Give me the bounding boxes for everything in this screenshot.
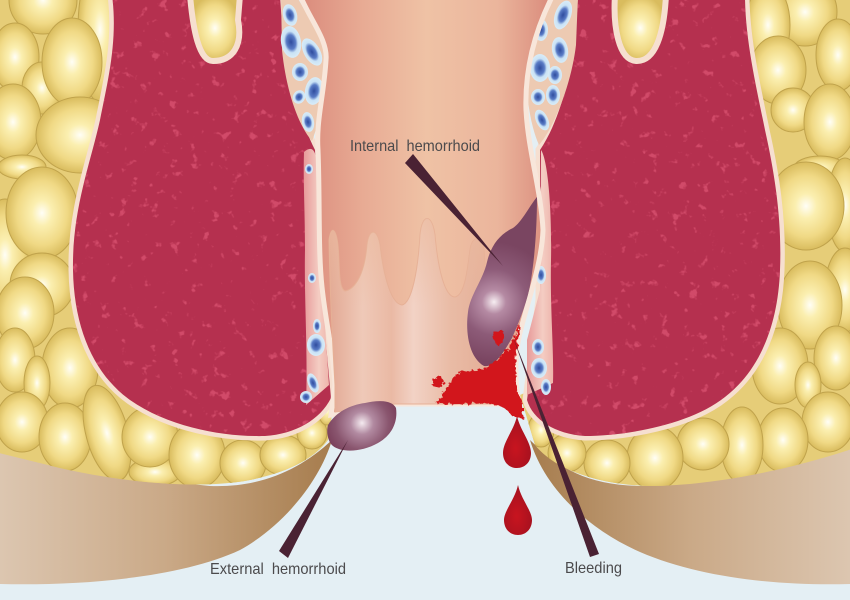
vessels left <box>278 0 327 141</box>
fat lobe left <box>190 0 240 61</box>
pointer: bleeding <box>513 337 599 557</box>
submucosal strip right <box>527 150 553 395</box>
skin right <box>530 440 850 584</box>
fat tissue right <box>520 0 850 490</box>
submucosal strip left <box>300 149 329 405</box>
blood <box>432 325 524 420</box>
blood drop lower <box>504 485 532 535</box>
fat tissue left <box>0 0 340 490</box>
fat lobe right <box>615 0 666 61</box>
muscle left <box>70 0 335 440</box>
blood drop upper <box>503 416 531 468</box>
muscle right <box>525 0 785 440</box>
skin left <box>0 440 332 584</box>
pointer: internal hemorrhoid <box>405 154 503 266</box>
label: internal hemorrhoid: Internal hemorrhoid <box>350 138 480 155</box>
external hemorrhoid <box>327 401 396 451</box>
vessels right <box>525 0 578 145</box>
internal hemorrhoid <box>467 197 537 366</box>
rectal folds <box>329 218 498 412</box>
pointer: external hemorrhoid <box>279 440 348 558</box>
anal canal <box>300 0 553 415</box>
label: external hemorrhoid: External hemorrhoid <box>210 561 346 578</box>
label: bleeding: Bleeding <box>565 560 622 577</box>
